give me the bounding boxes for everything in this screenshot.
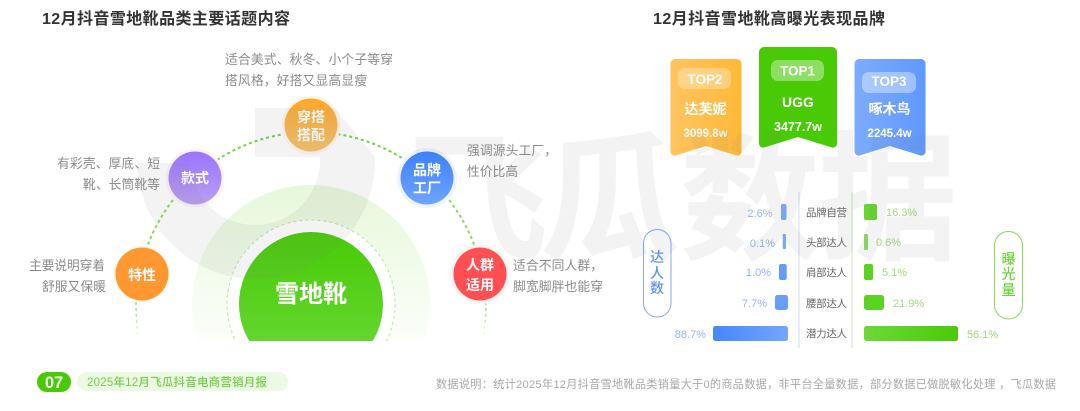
row: 头部达人 xyxy=(750,234,901,250)
row: 潜力达人: 88.7% xyxy=(675,329,706,341)
row: 头部达人: 0.6% xyxy=(876,237,901,249)
text: 人群适用 description xyxy=(513,258,603,294)
node: 人群适用: 人群 xyxy=(466,257,494,273)
watermark: 瓜 xyxy=(540,122,680,279)
text: 品牌工厂 description: 性价比高 xyxy=(467,164,518,179)
node: 特性 xyxy=(114,246,170,302)
left title: 12月抖音雪地靴品类主要话题内容 xyxy=(42,9,290,28)
row: 肩部达人: 肩部达人 xyxy=(806,266,848,279)
watermark: 数 xyxy=(680,122,820,279)
node: 穿搭搭配: 搭配 xyxy=(297,127,325,143)
dotted connector arc xyxy=(136,132,486,338)
text: 品牌工厂 description: 强调源头工厂， xyxy=(467,143,557,158)
row: 腰部达人: 腰部达人 xyxy=(806,297,848,310)
diverging bar chart xyxy=(675,192,998,348)
row: 肩部达人 xyxy=(746,264,907,280)
text: 特性 description: 舒服又保暖 xyxy=(42,279,106,294)
topic diagram xyxy=(114,96,510,341)
axis label: 曝光量: 曝 xyxy=(1002,251,1016,267)
row: 潜力达人: 56.1% xyxy=(967,329,998,341)
axis label: 曝光量 xyxy=(994,232,1022,319)
center hub: 雪地靴 xyxy=(192,185,430,341)
node: 人群适用: 适用 xyxy=(466,277,494,293)
ribbon: TOP1 UGG xyxy=(759,47,837,148)
axis label: 达人数: 数 xyxy=(650,280,664,296)
footer report name: 2025年12月飞瓜抖音电商营销月报 xyxy=(87,375,268,389)
row: 肩部达人: 5.1% xyxy=(882,267,907,279)
node: 人群适用 xyxy=(450,244,510,304)
text: 款式 description: 有彩壳、厚底、短 xyxy=(57,156,160,171)
node: 穿搭搭配: 穿搭 xyxy=(297,109,325,125)
text: 穿搭搭配 description xyxy=(225,52,393,88)
axis label: 曝光量: 光 xyxy=(1002,266,1016,282)
row: 品牌自营 xyxy=(747,204,917,220)
axis label: 达人数: 达 xyxy=(650,249,664,265)
row: 潜力达人: 潜力达人 xyxy=(806,327,848,340)
axis label: 达人数 xyxy=(644,230,671,317)
right title: 12月抖音雪地靴高曝光表现品牌 xyxy=(653,9,885,28)
ribbon: TOP1 UGG: 3477.7w xyxy=(774,120,822,134)
row: 头部达人: 头部达人 xyxy=(806,236,848,249)
ribbon: TOP3 啄木鸟: TOP3 xyxy=(871,74,907,89)
row: 腰部达人: 7.7% xyxy=(742,298,767,310)
node: 品牌工厂 xyxy=(397,148,457,208)
text: 款式 description xyxy=(57,156,160,192)
ribbon: TOP3 啄木鸟: 啄木鸟 xyxy=(868,101,910,117)
footer report name xyxy=(77,372,288,391)
ribbon: TOP3 啄木鸟 xyxy=(854,59,926,156)
text: 穿搭搭配 description: 适合美式、秋冬、小个子等穿 xyxy=(225,52,393,67)
footer page badge xyxy=(37,372,71,392)
axis label: 达人数: 人 xyxy=(650,265,664,281)
text: 穿搭搭配 description: 搭风格，好搭又显高显瘦 xyxy=(225,73,367,88)
text: 特性 description: 主要说明穿着 xyxy=(29,258,105,273)
text: 品牌工厂 description xyxy=(467,143,557,179)
node: 穿搭搭配 xyxy=(282,96,340,154)
ribbon: TOP2 达芙妮 xyxy=(670,59,742,156)
text: 人群适用 description: 适合不同人群， xyxy=(513,258,603,273)
text: 特性 description xyxy=(29,258,106,294)
footer page badge: 07 xyxy=(45,374,63,392)
node: 品牌工厂: 品牌 xyxy=(413,162,441,178)
row: 头部达人: 0.1% xyxy=(750,238,775,250)
axis label: 曝光量: 量 xyxy=(1002,282,1016,298)
row: 品牌自营: 16.3% xyxy=(886,207,917,219)
node: 款式: 款式 xyxy=(181,170,209,186)
footer data note: 数据说明：统计2025年12月抖音雪地靴品类销量大于0的商品数据，非平台全量数据，部分数据已做脱敏化处理 ，飞瓜数据 xyxy=(436,377,1056,391)
ribbon: TOP2 达芙妮: 3099.8w xyxy=(683,128,728,140)
center hub: 雪地靴: 雪地靴 xyxy=(275,281,347,308)
node: 款式 xyxy=(166,148,224,208)
ribbon: TOP2 达芙妮: TOP2 xyxy=(687,72,723,87)
ribbon: TOP1 UGG: TOP1 xyxy=(780,64,815,78)
text: 人群适用 description: 脚宽脚胖也能穿 xyxy=(513,279,603,294)
ribbon: TOP3 啄木鸟: 2245.4w xyxy=(867,128,912,140)
ribbon: TOP2 达芙妮: 达芙妮 xyxy=(684,101,726,117)
watermark xyxy=(137,108,958,279)
node: 特性: 特性 xyxy=(128,267,156,283)
watermark: 据 xyxy=(818,122,958,279)
row: 腰部达人 xyxy=(742,295,924,310)
row: 肩部达人: 1.0% xyxy=(746,267,771,279)
ribbon: TOP1 UGG: UGG xyxy=(782,94,814,110)
row: 潜力达人 xyxy=(675,326,998,341)
row: 品牌自营: 2.6% xyxy=(747,208,773,220)
text: 款式 description: 靴、长筒靴等 xyxy=(83,177,160,192)
watermark: 飞 xyxy=(408,122,548,279)
row: 腰部达人: 21.9% xyxy=(893,298,924,310)
node: 品牌工厂: 工厂 xyxy=(413,180,441,196)
row: 品牌自营: 品牌自营 xyxy=(806,206,847,219)
